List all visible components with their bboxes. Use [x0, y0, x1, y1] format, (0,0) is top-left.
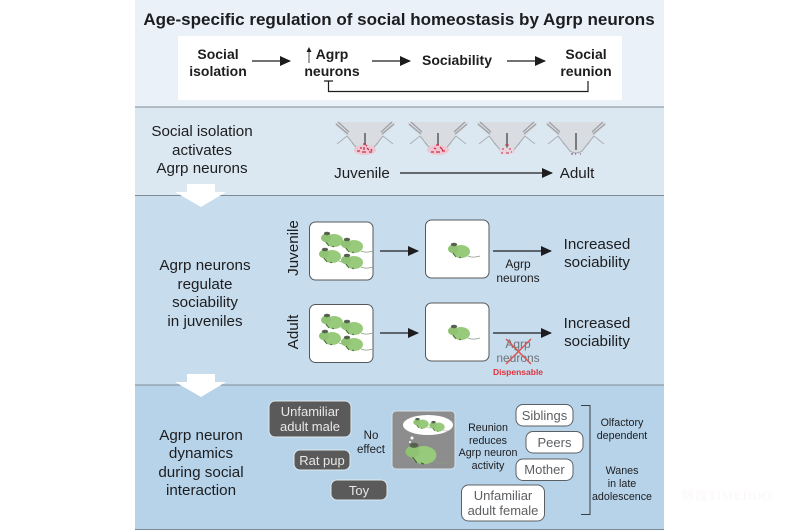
row: adult: Agrp: [505, 337, 531, 351]
row: adult: Dispensable: [493, 367, 543, 377]
flow diagram: [178, 36, 622, 100]
effective social stimuli: Mother: [524, 462, 565, 477]
flow diagram: neurons: [304, 63, 360, 79]
arrow: white down 2: [175, 374, 226, 397]
flow diagram: Social: [565, 46, 607, 62]
text: dynamics: [158, 427, 244, 499]
text: agrp neurons regulate: sociability: [172, 294, 238, 311]
row: juvenile: [285, 220, 630, 285]
no effect stimuli: adult male: [280, 419, 340, 434]
text: olfactory dependent: [597, 417, 647, 442]
row: adult: Adult: [285, 314, 302, 349]
text: olfactory dependent: dependent: [597, 430, 647, 442]
bracket: [581, 406, 590, 514]
no effect stimuli: [269, 401, 387, 500]
row: adult: neurons: [496, 351, 540, 365]
text: social isolation: Agrp neurons: [156, 160, 248, 177]
text: agrp neurons regulate: regulate: [178, 276, 232, 293]
text: dynamics: interaction: [166, 482, 236, 499]
flow diagram: reunion: [560, 63, 612, 79]
panel: social isolation activates: [135, 107, 664, 196]
effective social stimuli: [462, 404, 583, 521]
text: reunion reduces: Reunion: [468, 422, 508, 434]
effective social stimuli: Peers: [538, 435, 572, 450]
row: juvenile: Agrp: [505, 257, 531, 271]
flow diagram: isolation: [189, 63, 247, 79]
arrow: white down 1: [175, 184, 226, 207]
juvenile to adult arrow: [334, 165, 595, 182]
text: wanes in late adolescence: [592, 465, 652, 503]
text: olfactory dependent: Olfactory: [601, 417, 644, 429]
no effect stimuli: effect: [357, 444, 386, 456]
text: social isolation: activates: [172, 142, 232, 159]
title: Age-specific regulation of social homeostasis by Agrp neurons: [143, 10, 655, 29]
icon: mouse thinking of peers: [392, 411, 455, 469]
panel: sociability in juveniles: [135, 196, 664, 385]
flow diagram: Agrp: [316, 46, 348, 62]
row: juvenile: neurons: [496, 271, 540, 285]
no effect stimuli: Toy: [349, 483, 370, 498]
panel: dynamics during social interaction: [135, 385, 664, 530]
text: dynamics: Agrp neuron: [159, 427, 243, 444]
row: adult: sociability: [564, 333, 630, 350]
text: wanes in late adolescence: Wanes: [606, 465, 638, 477]
row: adult: Increased: [564, 315, 630, 332]
text: reunion reduces: reduces: [469, 435, 507, 447]
text: agrp neurons regulate: in juveniles: [167, 313, 243, 330]
row: juvenile: Juvenile: [285, 220, 302, 276]
row: juvenile: sociability: [564, 254, 630, 271]
flow diagram: Social: [197, 46, 239, 62]
brain sections: [335, 122, 606, 155]
juvenile to adult arrow: Juvenile: [334, 165, 390, 182]
text: agrp neurons regulate: [159, 257, 251, 330]
row: adult: [285, 303, 630, 377]
effective social stimuli: Unfamiliar: [474, 488, 533, 503]
effective social stimuli: adult female: [468, 503, 538, 518]
text: reunion reduces: activity: [472, 460, 505, 472]
row: juvenile: Increased: [564, 236, 630, 253]
text: wanes in late adolescence: adolescence: [592, 491, 652, 503]
text: social isolation: [151, 123, 253, 177]
text: dynamics: dynamics: [169, 445, 233, 462]
watermark: 脉度TIMEDOO: [682, 488, 772, 503]
juvenile to adult arrow: Adult: [560, 165, 595, 182]
no effect stimuli: No: [364, 430, 378, 442]
text: reunion reduces: [459, 422, 517, 472]
text: agrp neurons regulate: Agrp neurons: [159, 257, 251, 274]
flow diagram: Sociability: [422, 52, 492, 68]
panel: title section: [135, 0, 664, 107]
no effect stimuli: Rat pup: [299, 453, 345, 468]
text: dynamics: during social: [158, 464, 244, 481]
text: social isolation: Social isolation: [151, 123, 253, 140]
effective social stimuli: Siblings: [522, 408, 568, 423]
text: wanes in late adolescence: in late: [608, 478, 636, 490]
no effect stimuli: Unfamiliar: [281, 404, 340, 419]
text: reunion reduces: Agrp neuron: [459, 447, 517, 459]
